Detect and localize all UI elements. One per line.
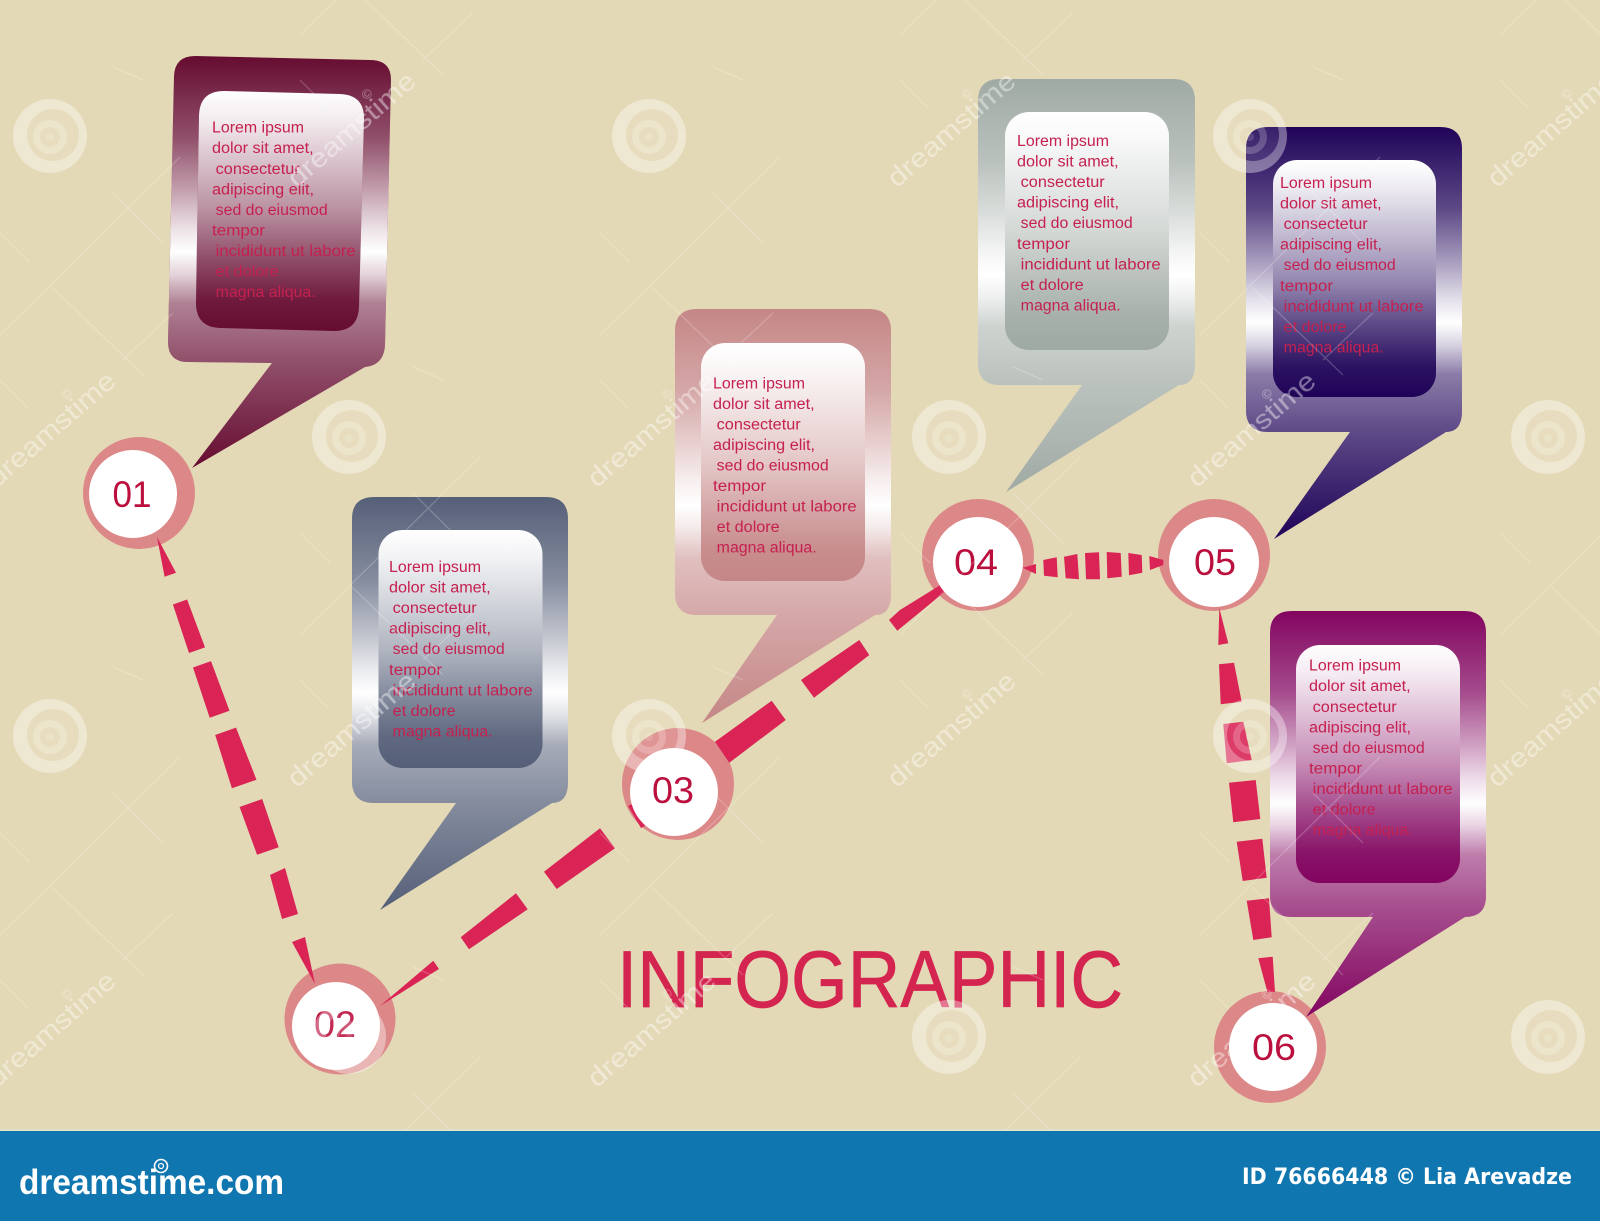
panel: speech bubble 01 maroon <box>168 56 391 468</box>
text: bubble 05 body: et dolore <box>1284 319 1347 336</box>
text: bubble 01 body: et dolore <box>216 264 279 281</box>
text: bubble 05 body: consectetur <box>1284 216 1368 233</box>
watermark spirals <box>13 99 1585 1074</box>
text: bubble 02 body: et dolore <box>393 703 456 720</box>
watermark wordmarks: © <box>958 85 976 103</box>
text: bubble 03 body: tempor <box>713 478 766 495</box>
dashed connector 01 to 02 <box>157 537 315 984</box>
watermark wordmarks: dreamstime <box>281 665 422 793</box>
text: bubble 01 body: tempor <box>212 222 265 239</box>
text: bubble 05 body: adipiscing elit, <box>1280 237 1382 254</box>
text: bubble 05 body: Lorem ipsum <box>1280 175 1372 192</box>
step marker 06: 06 <box>1252 1027 1296 1068</box>
text: bubble 03 body <box>713 375 857 557</box>
text: bubble 02 body: Lorem ipsum <box>389 559 481 576</box>
watermark wordmarks: © <box>658 385 676 403</box>
panel: speech bubble 05 indigo <box>1246 127 1462 539</box>
text: bubble 02 body <box>389 559 533 740</box>
text: bubble 04 body: magna aliqua. <box>1021 297 1121 314</box>
dashed connector 02 to 03 <box>380 701 786 1006</box>
text: bubble 04 body <box>1017 133 1161 314</box>
watermark wordmarks: dreamstime <box>1181 965 1322 1093</box>
watermark wordmarks: dreamstime <box>281 65 422 193</box>
text: bubble 01 body: sed do eiusmod <box>216 202 328 219</box>
watermark wordmarks: dreamstime <box>581 365 722 493</box>
text: bubble 03 body: adipiscing elit, <box>713 437 815 454</box>
text: bubble 06 body: adipiscing elit, <box>1309 719 1411 736</box>
dashed connector 03 to 04 <box>801 584 947 698</box>
text: bubble 03 body: sed do eiusmod <box>717 457 829 474</box>
text: bubble 06 body: et dolore <box>1313 802 1376 819</box>
step marker 05: 05 <box>1194 542 1236 583</box>
text: bubble 06 body: tempor <box>1309 760 1362 777</box>
text: bubble 04 body: tempor <box>1017 236 1070 253</box>
watermark wordmarks: dreamstime <box>881 665 1022 793</box>
title: INFOGRAPHIC <box>617 935 1123 1025</box>
step marker 05 <box>1169 517 1259 607</box>
footer logo: dreamstime.com <box>19 1163 284 1202</box>
text: bubble 05 body: tempor <box>1280 278 1333 295</box>
text: bubble 02 body: incididunt ut labore <box>393 682 533 699</box>
text: bubble 01 body: consectetur <box>216 161 300 178</box>
watermark wordmarks: © <box>358 85 376 103</box>
text: bubble 06 body: Lorem ipsum <box>1309 658 1401 675</box>
text: bubble 06 body: dolor sit amet, <box>1309 678 1411 695</box>
text: bubble 01 body <box>212 120 356 301</box>
text: bubble 03 body: consectetur <box>717 416 801 433</box>
text: bubble 04 body: consectetur <box>1021 174 1105 191</box>
step marker 02: 02 <box>314 1004 356 1045</box>
text: bubble 06 body: magna aliqua. <box>1313 822 1413 839</box>
panel: speech bubble 06 magenta <box>1270 611 1486 1017</box>
text: bubble 04 body: et dolore <box>1021 277 1084 294</box>
watermark wordmarks: dreamstime <box>581 965 722 1093</box>
text: bubble 03 body: et dolore <box>717 519 780 536</box>
step circle rings <box>83 437 1326 1103</box>
text: bubble 04 body: Lorem ipsum <box>1017 133 1109 150</box>
watermark wordmarks: © <box>1558 685 1576 703</box>
text: bubble 03 body: Lorem ipsum <box>713 375 805 392</box>
text: bubble 02 body: sed do eiusmod <box>393 641 505 658</box>
panel: speech bubble 03 rose <box>675 309 891 723</box>
text: bubble 06 body: consectetur <box>1313 699 1397 716</box>
text: bubble 04 body: adipiscing elit, <box>1017 195 1119 212</box>
text: bubble 02 body: consectetur <box>393 600 477 617</box>
watermark wordmarks: © <box>658 985 676 1003</box>
text: bubble 01 body: dolor sit amet, <box>212 140 314 157</box>
text: bubble 03 body: dolor sit amet, <box>713 396 815 413</box>
text: bubble 06 body: sed do eiusmod <box>1313 740 1425 757</box>
text: bubble 06 body <box>1309 658 1453 839</box>
footer image id and author credit: ID 76666448 © Lia Arevadze <box>1242 1165 1572 1190</box>
watermark wordmarks: © <box>1258 985 1276 1003</box>
watermark wordmarks: dreamstime <box>1181 365 1322 493</box>
watermark wordmarks: © <box>1258 385 1276 403</box>
text: bubble 06 body: incididunt ut labore <box>1313 781 1453 798</box>
dashed connector 04 to 05 <box>1023 552 1163 579</box>
text: bubble 02 body: adipiscing elit, <box>389 621 491 638</box>
step marker 03: 03 <box>652 770 694 811</box>
dashed connector 05 to 06 <box>1218 608 1275 992</box>
text: bubble 01 body: Lorem ipsum <box>212 120 304 137</box>
step marker 04 <box>933 517 1023 607</box>
watermark wordmarks: dreamstime <box>881 65 1022 193</box>
text: bubble 05 body: magna aliqua. <box>1284 339 1384 356</box>
text: bubble 01 body: magna aliqua. <box>216 284 316 301</box>
text: bubble 05 body: dolor sit amet, <box>1280 196 1382 213</box>
text: bubble 01 body: incididunt ut labore <box>216 243 356 260</box>
step marker 03 <box>630 748 718 836</box>
text: bubble 03 body: incididunt ut labore <box>717 499 857 516</box>
step marker 04: 04 <box>954 542 998 583</box>
text: bubble 04 body: incididunt ut labore <box>1021 256 1161 273</box>
watermark wordmarks: © <box>58 985 76 1003</box>
step marker 01 <box>89 450 177 538</box>
step marker 01: 01 <box>112 474 152 515</box>
text: bubble 02 body: tempor <box>389 662 442 679</box>
step marker 06 <box>1229 1003 1317 1091</box>
text: bubble 04 body: dolor sit amet, <box>1017 154 1119 171</box>
watermark wordmarks: © <box>1558 85 1576 103</box>
panel: speech bubble 02 slate <box>352 497 568 910</box>
step marker 02 <box>292 982 380 1070</box>
text: bubble 02 body: magna aliqua. <box>393 723 493 740</box>
text: bubble 05 body <box>1280 175 1424 356</box>
footer band <box>0 1130 1600 1221</box>
watermark wordmarks: © <box>958 685 976 703</box>
text: bubble 05 body: sed do eiusmod <box>1284 257 1396 274</box>
text: bubble 01 body: adipiscing elit, <box>212 181 314 198</box>
watermark wordmarks: © <box>58 385 76 403</box>
text: bubble 03 body: magna aliqua. <box>717 540 817 557</box>
panel: speech bubble 04 grey-green <box>978 79 1195 492</box>
text: bubble 04 body: sed do eiusmod <box>1021 215 1133 232</box>
text: bubble 02 body: dolor sit amet, <box>389 580 491 597</box>
watermark wordmarks: © <box>358 685 376 703</box>
text: bubble 05 body: incididunt ut labore <box>1284 298 1424 315</box>
